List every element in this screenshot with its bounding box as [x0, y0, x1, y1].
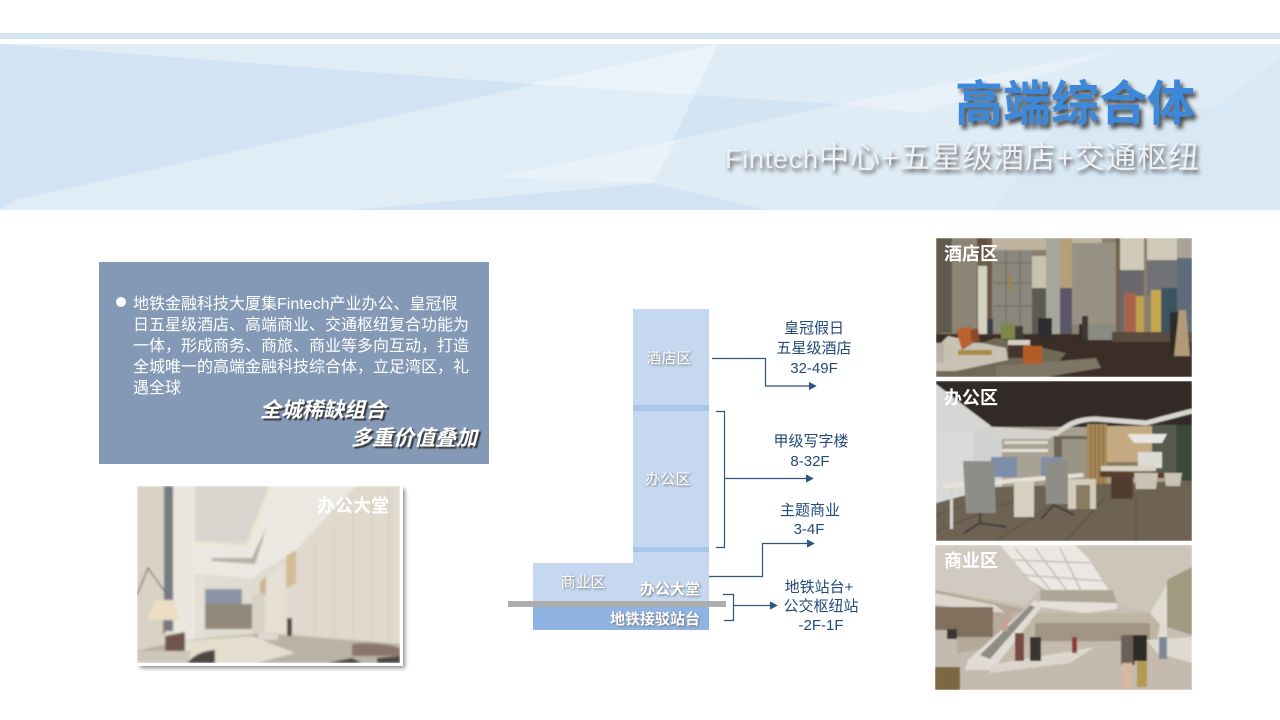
underground block: metro	[533, 607, 709, 630]
floor label: metro: 地铁站台+	[785, 579, 853, 596]
arrow: hotel	[712, 358, 816, 390]
zone label: lobby: 办公大堂	[640, 581, 700, 598]
tower block: hotel zone	[633, 309, 709, 405]
floor label: metro: -2F-1F	[798, 617, 844, 634]
floor label: office: 甲级写字楼	[773, 433, 849, 450]
floor label: hotel: 五星级酒店	[776, 340, 852, 357]
floor label: office	[773, 433, 849, 470]
zone label: metro platform: 地铁接驳站台	[610, 611, 700, 628]
photo: office zone	[936, 381, 1192, 541]
floor label: hotel: 皇冠假日	[784, 320, 844, 337]
floor label: metro	[783, 579, 859, 634]
description text block: 一体，形成商务、商旅、商业等多向互动，打造	[133, 338, 469, 355]
photo: office lobby	[137, 486, 400, 663]
podium block: retail	[533, 563, 709, 601]
bracket and arrow: office	[716, 412, 812, 548]
description text block: 日五星级酒店、高端商业、交通枢纽复合功能为	[133, 317, 469, 334]
floor label: retail	[780, 502, 840, 538]
floor label: metro: 公交枢纽站	[783, 598, 859, 615]
description text block: 遇全球	[133, 380, 181, 397]
zone label: retail: 商业区	[560, 574, 606, 591]
photo: retail zone	[935, 545, 1192, 690]
floor label: hotel	[776, 320, 852, 377]
floor label: retail: 主题商业	[780, 502, 840, 519]
callout: rare combination: 全城稀缺组合	[260, 399, 386, 422]
zone label: office: 办公区	[645, 471, 691, 488]
subtitle: Fintech中心+五星级酒店+交通枢纽	[725, 141, 1200, 175]
header banner	[0, 33, 1280, 210]
tower block: office zone	[633, 411, 709, 547]
description text block: 地铁金融科技大厦集Fintech产业办公、皇冠假	[133, 296, 457, 313]
icon: bullet	[116, 297, 126, 307]
title: 高端综合体	[955, 78, 1195, 131]
floor label: office: 8-32F	[790, 453, 830, 470]
diagram: building section	[508, 309, 726, 630]
zone label: hotel: 酒店区	[646, 350, 692, 367]
label: hotel zone: 酒店区	[944, 244, 998, 264]
tower block: lobby	[633, 552, 709, 572]
arrow: retail	[709, 540, 814, 576]
label: retail zone: 商业区	[944, 551, 998, 571]
bracket and arrow: metro	[723, 594, 776, 620]
description text block	[116, 295, 469, 397]
floor label: hotel: 32-49F	[790, 360, 838, 377]
callout: value stacking: 多重价值叠加	[351, 427, 477, 450]
panel: description	[99, 262, 489, 464]
arrows and brackets	[709, 358, 817, 622]
label: office zone: 办公区	[944, 388, 998, 408]
floor label: retail: 3-4F	[794, 521, 824, 538]
photo: hotel zone	[936, 238, 1192, 377]
label: office lobby: 办公大堂	[317, 496, 389, 516]
ground line	[508, 601, 726, 607]
description text block: 全城唯一的高端金融科技综合体，立足湾区，礼	[133, 359, 469, 376]
